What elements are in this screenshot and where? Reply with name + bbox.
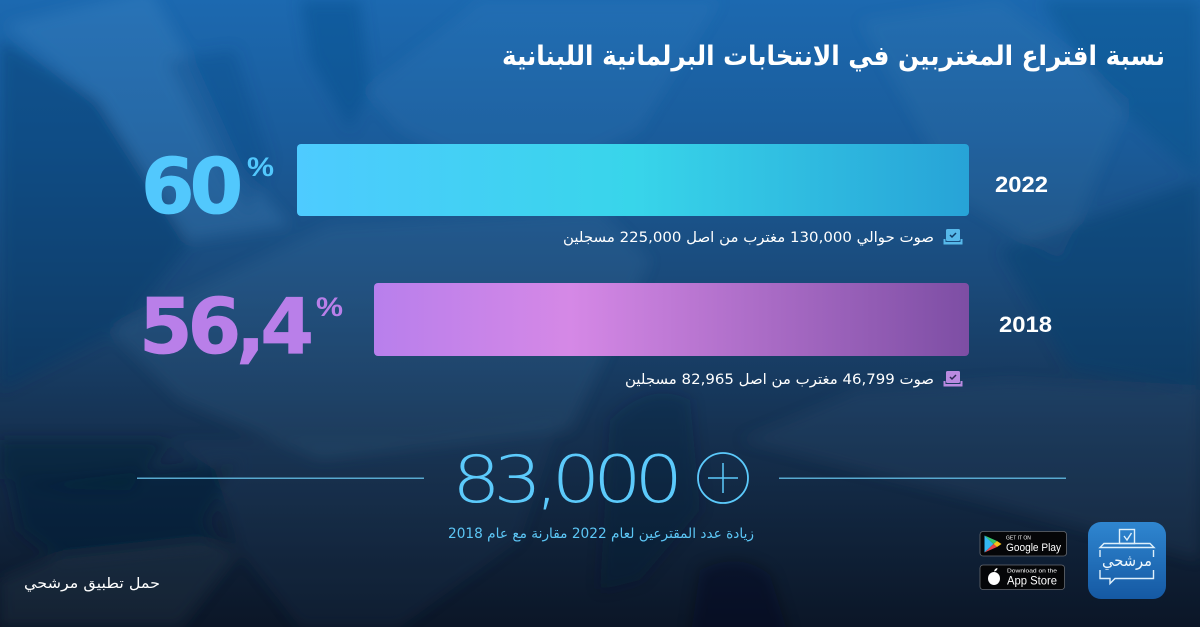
badge: Google Play: Google Play bbox=[1006, 542, 1061, 554]
note 2018: صوت 46,799 مغترب من اصل 82,965 مسجلين bbox=[625, 372, 934, 388]
badge: App Store: Download on the bbox=[1007, 568, 1057, 574]
note 2022: صوت حوالي 130,000 مغترب من اصل 225,000 مسجلين bbox=[563, 230, 934, 246]
year label 2022: 2022 bbox=[995, 172, 1048, 197]
percent value 60: % bbox=[247, 152, 274, 182]
row: 2018 bbox=[139, 283, 1052, 388]
year label 2018: 2018 bbox=[999, 312, 1052, 337]
divider line right bbox=[779, 478, 1066, 479]
icon: plus in circle bbox=[698, 453, 748, 503]
percent value 56,4: 56,4 bbox=[139, 283, 311, 372]
badge: App Store bbox=[980, 565, 1064, 590]
divider line left bbox=[137, 478, 424, 479]
percent value 60: 60 bbox=[141, 143, 240, 232]
icon: ballot box 2022 bbox=[944, 229, 962, 244]
app icon bbox=[1088, 522, 1166, 599]
icon: ballot box 2018 bbox=[944, 371, 962, 386]
bar 2022 bbox=[297, 144, 969, 216]
badge: Google Play: GET IT ON bbox=[1006, 536, 1031, 542]
icon: apple bbox=[988, 568, 1000, 585]
badge: Google Play bbox=[980, 532, 1066, 556]
total increase number: 83,000 bbox=[452, 442, 676, 518]
download caption: حمل تطبيق مرشحي bbox=[24, 576, 160, 592]
increase caption: زيادة عدد المقترعين لعام 2022 مقارنة مع عام 2018 bbox=[448, 526, 754, 542]
bar 2018 bbox=[374, 283, 969, 356]
badge: App Store: App Store bbox=[1007, 576, 1057, 588]
app icon: مرشحي bbox=[1102, 551, 1152, 571]
row: 2022 bbox=[141, 143, 1048, 246]
percent value 56,4: % bbox=[316, 292, 343, 322]
icon: play triangle bbox=[984, 536, 1002, 552]
